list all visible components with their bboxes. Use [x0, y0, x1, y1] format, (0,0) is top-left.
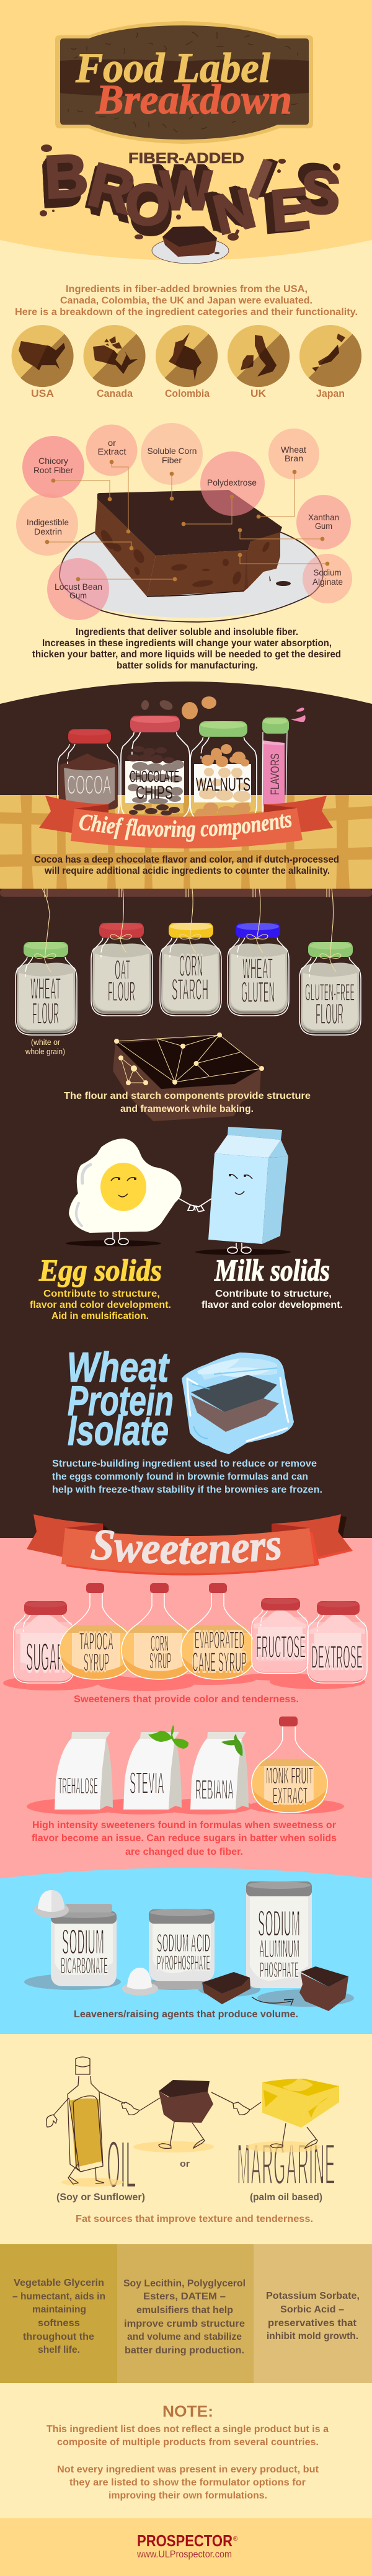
text: WHEAT [30, 971, 61, 1007]
panel: glycerin: Vegetable Glycerin [14, 2278, 104, 2288]
wheat protein text [52, 1459, 322, 1495]
shadows under leavener jars [24, 1974, 354, 2007]
heading: egg solids: Egg solids [38, 1253, 162, 1287]
note body: they are listed to show the formulator options for [69, 2477, 306, 2488]
panel: glycerin: – humectant, aids in [12, 2291, 105, 2302]
ribbon: chief flavoring components: Chief flavoring components [79, 814, 291, 842]
bubble: locust bean gum: Locust Bean [55, 582, 102, 592]
website: www.ULProspector.com [136, 2549, 232, 2560]
scoop on ground [122, 1968, 202, 1996]
ribbon: chief flavoring components [39, 796, 333, 848]
high intensity text: flavor become an issue. Can reduce sugars in batter when solids [32, 1833, 337, 1844]
heading: milk solids: Milk solids [214, 1253, 330, 1287]
text: GLUTEN [241, 975, 275, 1010]
label: USA [31, 388, 54, 399]
text: SUGAR [26, 1634, 64, 1681]
risen brownie [299, 1966, 348, 2011]
BROWNIES 3D letters: I [242, 149, 279, 211]
framework text [64, 1091, 311, 1114]
label: Canada [97, 388, 133, 399]
rod [0, 889, 372, 897]
fat section background [0, 2034, 372, 2244]
text: REBIANA [195, 1773, 234, 1806]
bubble: xanthan gum: Gum [315, 521, 332, 531]
bubble: soluble corn fiber [141, 423, 203, 485]
panel: glycerin: softness [38, 2318, 80, 2329]
label: palm oil based: (palm oil based) [250, 2192, 322, 2203]
egg text [30, 1289, 171, 1321]
text: SODIUM ACID [157, 1928, 210, 1958]
panel: glycerin: maintaining [32, 2304, 86, 2315]
bubble: soluble corn fiber: Soluble Corn [148, 446, 197, 456]
jar: sugar [14, 1601, 74, 1683]
intro text: Here is a breakdown of the ingredient categories and their functionality. [15, 307, 358, 318]
text: TAPIOCA [79, 1627, 113, 1656]
text: TREHALOSE [58, 1773, 98, 1800]
bubble: wheat bran [268, 429, 319, 479]
text: EVAPORATED [195, 1625, 244, 1654]
bubble: or extract: or [108, 438, 116, 448]
fiber description text: thicken your batter, and more liquids will be needed to get the desired [32, 649, 341, 660]
jar: chocolate chips: CHIPS [136, 783, 173, 803]
bottle: corn syrup [122, 1583, 196, 1679]
title: Food Label: Food Label [75, 44, 270, 91]
bubble: indigestible dextrin: Dextrin [34, 526, 62, 536]
milk text: Contribute to structure, [215, 1289, 332, 1299]
BROWNIES 3D letters: S [298, 156, 343, 228]
jar: walnuts: WALNUTS [196, 775, 250, 795]
margarine character [250, 2079, 339, 2148]
jar: oat flour [91, 923, 153, 1016]
sweeteners caption: Sweeteners that provide color and tenderness. [74, 1694, 299, 1705]
panel: emulsifiers: Esters, DATEM – [143, 2291, 226, 2302]
panel: preservatives [254, 2244, 372, 2383]
fiber description text: batter solids for manufacturing. [117, 660, 258, 671]
bubble: sodium alginate: Alginate [312, 577, 343, 587]
strings and bows [35, 889, 341, 972]
oil bottle character [46, 2057, 140, 2184]
BROWNIES 3D letters: N [207, 177, 262, 247]
plate [60, 532, 323, 622]
bag: trehalose [55, 1732, 113, 1810]
milk carton character [195, 1127, 291, 1255]
pink section background [0, 1538, 372, 1885]
bubble: locust bean gum: Gum [69, 590, 87, 600]
bubble: chicory root fiber: Root Fiber [33, 465, 73, 475]
text: CORN [179, 948, 203, 984]
panel: preservatives: preservatives that [268, 2318, 357, 2329]
jar: dextrose [308, 1601, 367, 1683]
jar: sodium acid pyrophosphate [149, 1909, 215, 1981]
background: page cream [0, 0, 372, 273]
framework text: and framework while baking. [120, 1104, 254, 1114]
panel: emulsifiers: Soy Lecithin, Polyglycerol [123, 2278, 246, 2289]
shadows under sweetener jars [3, 1673, 365, 1691]
jar: cocoa: COCOA [67, 770, 111, 800]
fiber description text: Increases in these ingredients will change your water absorption, [42, 638, 332, 649]
note body: This ingredient list does not reflect a single product but is a [46, 2424, 329, 2435]
holding hands [178, 1198, 211, 1212]
tablecloth [0, 795, 372, 889]
fiber description text [32, 627, 341, 671]
ingredient bubbles [16, 423, 352, 620]
bottle: corn syrup: CORN [151, 1631, 169, 1657]
bubble: chicory root fiber: Chicory [38, 456, 68, 466]
panel: glycerin: throughout the [23, 2332, 94, 2342]
panel: preservatives: Sorbic Acid – [280, 2304, 344, 2315]
bubble: xanthan gum: Xanthan [308, 512, 339, 522]
note: white or whole grain [25, 1038, 65, 1056]
country: USA [11, 325, 74, 399]
footer with logo [0, 2518, 372, 2576]
country: Colombia [156, 325, 218, 399]
egg text: Contribute to structure, [43, 1289, 160, 1299]
title plaque [55, 21, 313, 144]
milk text: flavor and color development. [202, 1300, 343, 1310]
falling beans, walnuts and drops [141, 696, 306, 722]
text: SODIUM [62, 1921, 104, 1963]
leader lines and dots [45, 460, 329, 581]
bubble: indigestible dextrin: Indigestible [27, 517, 69, 527]
title: Breakdown: Breakdown [95, 76, 292, 123]
fried egg character [66, 1140, 180, 1246]
label: or: or [180, 2159, 190, 2169]
country: UK [228, 325, 290, 399]
milk text [202, 1289, 343, 1310]
bubble: soluble corn fiber: Fiber [162, 455, 182, 465]
label: UK [250, 388, 266, 399]
note panel [0, 2383, 372, 2518]
country: Japan [299, 325, 361, 399]
jar: flavors [262, 717, 289, 812]
note: white or whole grain: whole grain) [25, 1047, 65, 1056]
note heading: NOTE: [162, 2403, 213, 2420]
label: Japan [316, 388, 345, 399]
note: white or whole grain: (white or [31, 1038, 60, 1047]
text: FLOUR [108, 975, 135, 1008]
jar: oat flour: OAT [115, 953, 130, 986]
wheat protein text: the eggs commonly found in brownie formulas and can [52, 1472, 308, 1482]
label: soy or sunflower: (Soy or Sunflower) [56, 2192, 145, 2203]
icon: stevia leaves [148, 1725, 188, 1749]
label: Colombia [165, 388, 210, 399]
panel: preservatives: Potassium Sorbate, [266, 2291, 360, 2301]
ribbon: sweeteners [27, 1514, 353, 1575]
panel: emulsifiers: improve crumb structure [124, 2319, 245, 2329]
bubble: or extract [86, 424, 138, 476]
bottle: evaporated cane syrup [181, 1583, 255, 1679]
jar: cocoa [58, 729, 119, 822]
bottle: monk fruit extract [252, 1717, 327, 1813]
text: BICARBONATE [61, 1953, 108, 1979]
heading: wheat protein isolate: Wheat [67, 1344, 170, 1391]
heading: wheat protein isolate: Protein [68, 1377, 174, 1424]
text: WHEAT [242, 951, 273, 986]
bottle: tapioca syrup [60, 1583, 134, 1679]
BROWNIES 3D letters: O [125, 172, 170, 237]
scoop on jar [34, 1890, 112, 1918]
bubble: chicory root fiber [22, 436, 84, 498]
cocoa text: will require additional acidic ingredients to counter the alkalinity. [44, 866, 330, 876]
BROWNIES 3D letters: W [160, 160, 212, 222]
high intensity text: are changed due to fiber. [125, 1847, 243, 1857]
panel: emulsifiers [117, 2244, 254, 2383]
bubble: indigestible dextrin [16, 494, 78, 556]
text: STARCH [172, 972, 208, 1007]
jar: fructose [252, 1598, 308, 1673]
bag: stevia [123, 1725, 188, 1810]
shadows under bags [27, 1798, 344, 1814]
icon: rebiana leaves [221, 1734, 242, 1756]
fat caption: Fat sources that improve texture and tenderness. [76, 2214, 313, 2224]
note body [46, 2424, 329, 2501]
ice cube with brownie [182, 1352, 294, 1454]
shadows under fat characters [61, 2141, 321, 2187]
intro text [15, 284, 358, 318]
dark brown section background [0, 682, 372, 1539]
jar: gluten-free flour [299, 942, 361, 1035]
intro text: Ingredients in fiber-added brownies from the USA, [66, 284, 308, 295]
framework brownie [113, 1033, 264, 1121]
bubble: wheat bran: Wheat [281, 445, 306, 455]
bubble: xanthan gum [296, 495, 351, 549]
panel: glycerin [0, 2244, 117, 2383]
heading: wheat protein isolate [67, 1344, 174, 1454]
jar: wheat flour [16, 942, 77, 1035]
cocoa text [34, 855, 339, 876]
big brownie [95, 490, 291, 597]
leaveners caption: Leaveners/raising agents that produce volume. [74, 2009, 298, 2020]
arrow: volume increase [252, 1997, 293, 2005]
panel: emulsifiers: emulsifiers that help [136, 2305, 233, 2316]
background: header curve [0, 0, 372, 260]
country: Canada [83, 325, 146, 399]
jar: sodium aluminum phosphate [246, 1881, 312, 1988]
BROWNIES 3D letters: E [268, 175, 312, 244]
panel: emulsifiers: and volume and stabilize [127, 2332, 242, 2342]
bag: stevia: STEVIA [130, 1765, 164, 1801]
ribbon: sweeteners: Sweeteners [91, 1530, 280, 1565]
bubble: sodium alginate [303, 554, 352, 603]
text: FLOUR [32, 996, 59, 1032]
egg text: flavor and color development. [30, 1300, 171, 1310]
bottle: corn syrup: SYRUP [149, 1648, 171, 1674]
panel: glycerin: shelf life. [38, 2345, 80, 2355]
panel: preservatives: inhibit mold growth. [267, 2331, 358, 2342]
bubble: polydextrose [200, 451, 265, 516]
registered mark: ® [233, 2536, 238, 2543]
intro text: Canada, Colombia, the UK and Japan were evaluated. [60, 295, 312, 306]
note body: Not every ingredient was present in every product, but [57, 2464, 319, 2475]
fiber description text: Ingredients that deliver soluble and insoluble fiber. [76, 627, 298, 637]
high intensity text [32, 1820, 337, 1857]
cocoa text: Cocoa has a deep chocolate flavor and color, and if dutch-processed [34, 855, 339, 865]
wheat protein text: help with freeze-thaw stability if the brownies are frozen. [52, 1485, 322, 1495]
subtitle: fiber-added: FIBER-ADDED [128, 150, 244, 167]
jar: chocolate chips [121, 716, 190, 820]
jar: sodium bicarbonate [51, 1911, 117, 1986]
note body: improving their own formulations. [108, 2490, 267, 2501]
small plated brownie [152, 226, 229, 264]
brownie character [140, 2080, 250, 2148]
jar: flavors: FLAVORS [269, 753, 282, 795]
text: OIL [107, 2125, 136, 2205]
jar: chocolate chips: CHOCOLATE [130, 767, 179, 786]
jar: walnuts [190, 721, 257, 822]
bubble: locust bean gum [47, 558, 109, 620]
wheat protein text: Structure-building ingredient used to reduce or remove [52, 1459, 317, 1469]
egg text: Aid in emulsification. [51, 1311, 149, 1321]
small brownie [202, 1972, 250, 2004]
note body: composite of multiple products from several countries. [57, 2437, 319, 2448]
bubble: wheat bran: Bran [285, 453, 303, 463]
text: PYROPHOSPHATE [157, 1951, 210, 1975]
bottle: tapioca syrup: SYRUP [84, 1648, 109, 1677]
panel: emulsifiers: batter during production. [125, 2345, 244, 2356]
logo: Prospector: PROSPECTOR [137, 2531, 232, 2550]
jar: corn starch [160, 923, 221, 1016]
high intensity text: High intensity sweeteners found in formulas when sweetness or [32, 1820, 336, 1831]
jar: wheat gluten [228, 923, 289, 1016]
BROWNIES 3D letters: R [81, 149, 142, 228]
bubble: or extract: Extract [98, 446, 126, 456]
BROWNIES 3D letters [0, 149, 372, 254]
crumbs around title letters [40, 144, 340, 241]
bag: rebiana [190, 1732, 249, 1810]
blue section background [0, 1868, 372, 2034]
heading: wheat protein isolate: Isolate [68, 1407, 169, 1454]
framework text: The flour and starch components provide structure [64, 1091, 311, 1101]
bubble: sodium alginate: Sodium [314, 567, 341, 577]
bubble: polydextrose: Polydextrose [207, 477, 257, 487]
